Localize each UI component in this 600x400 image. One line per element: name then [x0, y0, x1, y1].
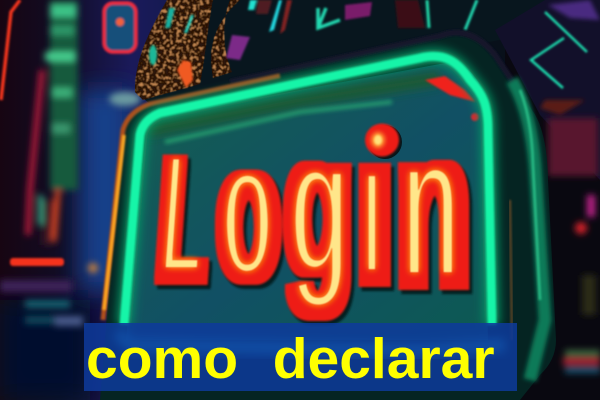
orange rusty rim: [103, 76, 280, 320]
green neon tube frame: [124, 56, 492, 325]
blurred green column left: [28, 0, 78, 245]
login word red body: L: [153, 122, 214, 320]
blurred base with red ring lower left: [0, 258, 98, 326]
red neon line far left: [1, 0, 20, 100]
login word yellow tube: g: [291, 102, 348, 309]
login word red body: [152, 152, 471, 323]
i dot: [365, 124, 402, 159]
login neon word: [152, 122, 474, 323]
login word red body: o: [218, 101, 279, 321]
login word yellow tube: n: [403, 94, 459, 318]
cyan and magenta shards on rock: [149, 0, 292, 88]
panel green haze: [165, 102, 392, 142]
login word red body: g: [285, 90, 352, 318]
login word yellow tube: L: [156, 122, 210, 306]
login word red body: i: [356, 84, 394, 330]
login word shadow: L: [156, 126, 217, 324]
title text: como declarar: [86, 327, 495, 391]
red neon rounded frame top: [104, 3, 136, 52]
sign panel: [126, 64, 488, 340]
sign casing: [100, 33, 556, 400]
green side strip right: [512, 80, 545, 380]
red paint patch: [425, 76, 479, 121]
login word shadow: ı: [359, 88, 397, 334]
panel dark green band under tube: [145, 78, 440, 130]
under-banner cyan tube reflection: [118, 332, 505, 350]
light streak: [109, 92, 141, 106]
login word shadow: o: [221, 105, 282, 325]
login word shadow: g: [288, 94, 355, 322]
login word shadow: [156, 86, 473, 339]
login word shadow: n: [400, 86, 473, 339]
rusty rock behind sign: [135, 0, 600, 104]
login word yellow tube: o: [223, 106, 272, 312]
login word red body: n: [397, 82, 470, 335]
login word yellow tube: i: [363, 104, 381, 312]
green neon T lines right: [495, 0, 600, 180]
neon glyphs top right: [318, 0, 477, 30]
right background lights: [563, 195, 600, 373]
title banner: [84, 323, 517, 391]
login word yellow tube: [160, 154, 458, 310]
